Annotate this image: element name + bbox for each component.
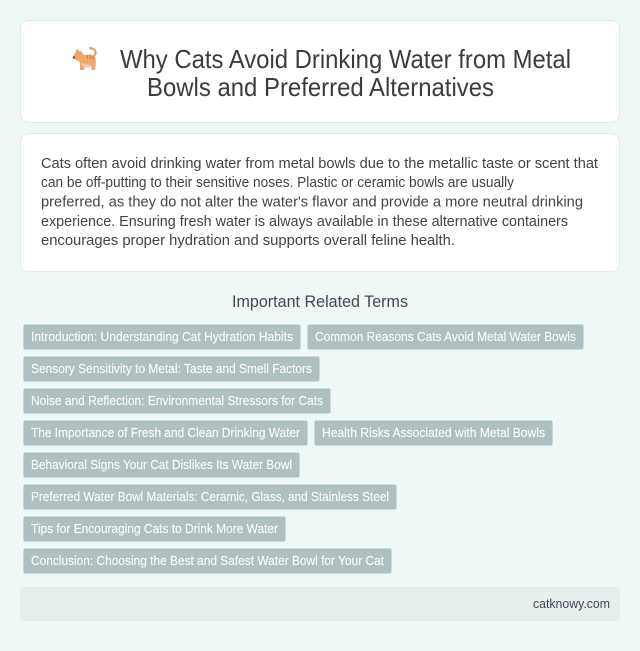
summary text: preferred, as they do not alter the water's flavor and provide a more neutral drinking <box>41 194 583 210</box>
tag: Noise and Reflection: Environmental Stressors for Cats <box>31 394 323 408</box>
header card <box>20 20 620 122</box>
tag <box>24 388 330 414</box>
summary text <box>41 156 598 249</box>
heading: related terms: Important Related Terms <box>232 293 408 311</box>
tag: Sensory Sensitivity to Metal: Taste and Smell Factors <box>31 362 312 376</box>
tag <box>24 516 286 542</box>
tag <box>24 356 320 382</box>
tag: Introduction: Understanding Cat Hydration Habits <box>31 330 293 344</box>
title: Bowls and Preferred Alternatives <box>147 72 494 102</box>
tag: Tips for Encouraging Cats to Drink More Water <box>31 522 278 536</box>
title: Why Cats Avoid Drinking Water from Metal <box>120 44 571 74</box>
tag <box>308 324 584 350</box>
summary text: Cats often avoid drinking water from metal bowls due to the metallic taste or scent that <box>41 156 598 172</box>
panel: summary <box>20 134 620 272</box>
tag <box>314 420 552 446</box>
tag: Preferred Water Bowl Materials: Ceramic, Glass, and Stainless Steel <box>31 490 389 504</box>
tag <box>24 452 300 478</box>
tag <box>24 548 392 574</box>
tag: Conclusion: Choosing the Best and Safest Water Bowl for Your Cat <box>31 554 384 568</box>
tag: Behavioral Signs Your Cat Dislikes Its Water Bowl <box>31 458 292 472</box>
tag <box>24 420 308 446</box>
tags: related terms <box>24 324 584 574</box>
tag: Health Risks Associated with Metal Bowls <box>322 426 545 440</box>
tag <box>24 324 300 350</box>
icon: cat <box>73 48 96 70</box>
summary text: encourages proper hydration and supports overall feline health. <box>41 233 455 249</box>
tag: Common Reasons Cats Avoid Metal Water Bowls <box>315 330 576 344</box>
tag: The Importance of Fresh and Clean Drinking Water <box>31 426 300 440</box>
footer <box>20 587 620 621</box>
title <box>120 44 571 102</box>
footer: catknowy.com <box>533 597 610 611</box>
summary text: can be off-putting to their sensitive noses. Plastic or ceramic bowls are usually <box>41 175 515 191</box>
tag <box>24 484 396 510</box>
summary text: experience. Ensuring fresh water is always available in these alternative containers <box>41 214 568 230</box>
